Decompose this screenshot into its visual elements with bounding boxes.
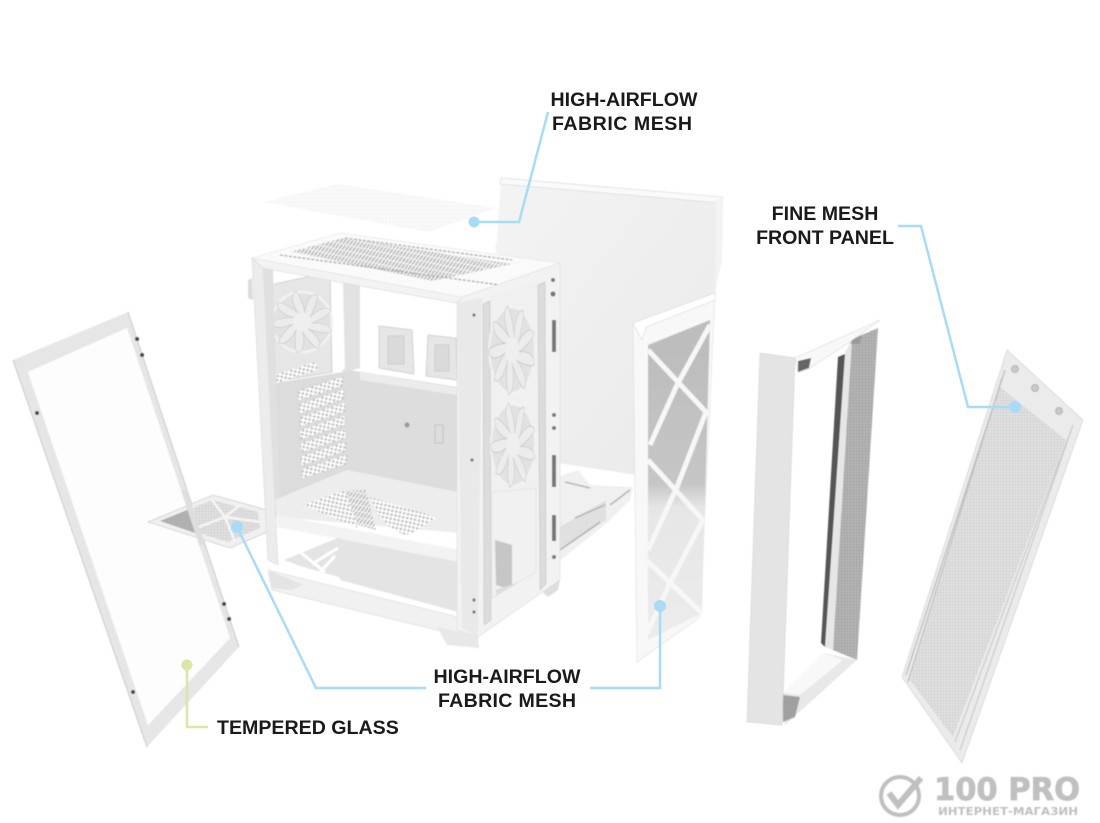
watermark logo <box>881 772 1080 818</box>
glass screws <box>35 337 231 694</box>
frame bottom bar <box>783 653 857 725</box>
case body <box>248 233 560 648</box>
leader: bottom fabric mesh <box>231 521 426 688</box>
label: high-airflow fabric mesh top: FABRIC MESH <box>552 113 692 135</box>
top vent <box>280 238 512 285</box>
frame left face <box>747 353 795 725</box>
rear fan <box>270 272 333 384</box>
top fabric mesh sheet <box>263 184 497 232</box>
front fan top <box>488 305 536 396</box>
left pillar <box>252 258 278 565</box>
frame top bar <box>795 320 880 372</box>
leader: top fabric mesh <box>468 112 548 228</box>
fine mesh front panel <box>902 350 1083 763</box>
front rails <box>483 282 546 625</box>
rear wall with expansion slots <box>275 372 347 500</box>
glass frame overlap <box>181 490 205 545</box>
expansion slots <box>298 376 347 479</box>
mesh panel lattice <box>643 325 710 633</box>
leader: tempered glass <box>182 660 208 727</box>
drive cages <box>379 326 457 380</box>
front bracket details <box>470 278 556 614</box>
illustration <box>13 178 1083 763</box>
front fan bottom <box>489 402 536 489</box>
label: high-airflow fabric mesh bottom: HIGH-AIRFLOW <box>434 666 581 688</box>
logo check icon <box>881 777 921 815</box>
label: fine mesh front panel: FRONT PANEL <box>756 227 894 249</box>
right inner shade behind front <box>475 285 545 625</box>
case top <box>252 233 560 297</box>
top rail <box>252 258 462 303</box>
side back panel <box>495 178 723 475</box>
motherboard tray <box>343 369 458 492</box>
label: tempered glass: TEMPERED GLASS <box>217 717 399 739</box>
watermark logo: ИНТЕРНЕТ-МАГАЗИН <box>938 805 1078 818</box>
leader: fine mesh <box>898 226 1021 413</box>
bottom fabric mesh filter <box>148 495 267 548</box>
watermark logo: 100 PRO <box>934 772 1080 808</box>
rear bracket <box>557 470 633 563</box>
rear mid pillar <box>343 281 360 372</box>
psu bay <box>284 537 545 605</box>
psu shroud <box>277 517 462 613</box>
label: high-airflow fabric mesh bottom: FABRIC MESH <box>438 690 576 712</box>
front frame piece <box>747 320 880 725</box>
label: high-airflow fabric mesh top: HIGH-AIRFLOW <box>551 89 698 111</box>
front airflow mesh panel <box>633 293 715 662</box>
tempered glass panel <box>13 312 239 747</box>
panel pegs <box>1012 366 1062 414</box>
shroud mesh <box>303 490 437 535</box>
front frame <box>457 263 560 637</box>
shroud top plate <box>275 470 460 533</box>
leader: front fabric mesh <box>590 600 666 688</box>
label: fine mesh front panel: FINE MESH <box>772 203 878 225</box>
case base and feet <box>268 570 560 648</box>
frame mesh side <box>833 328 878 660</box>
